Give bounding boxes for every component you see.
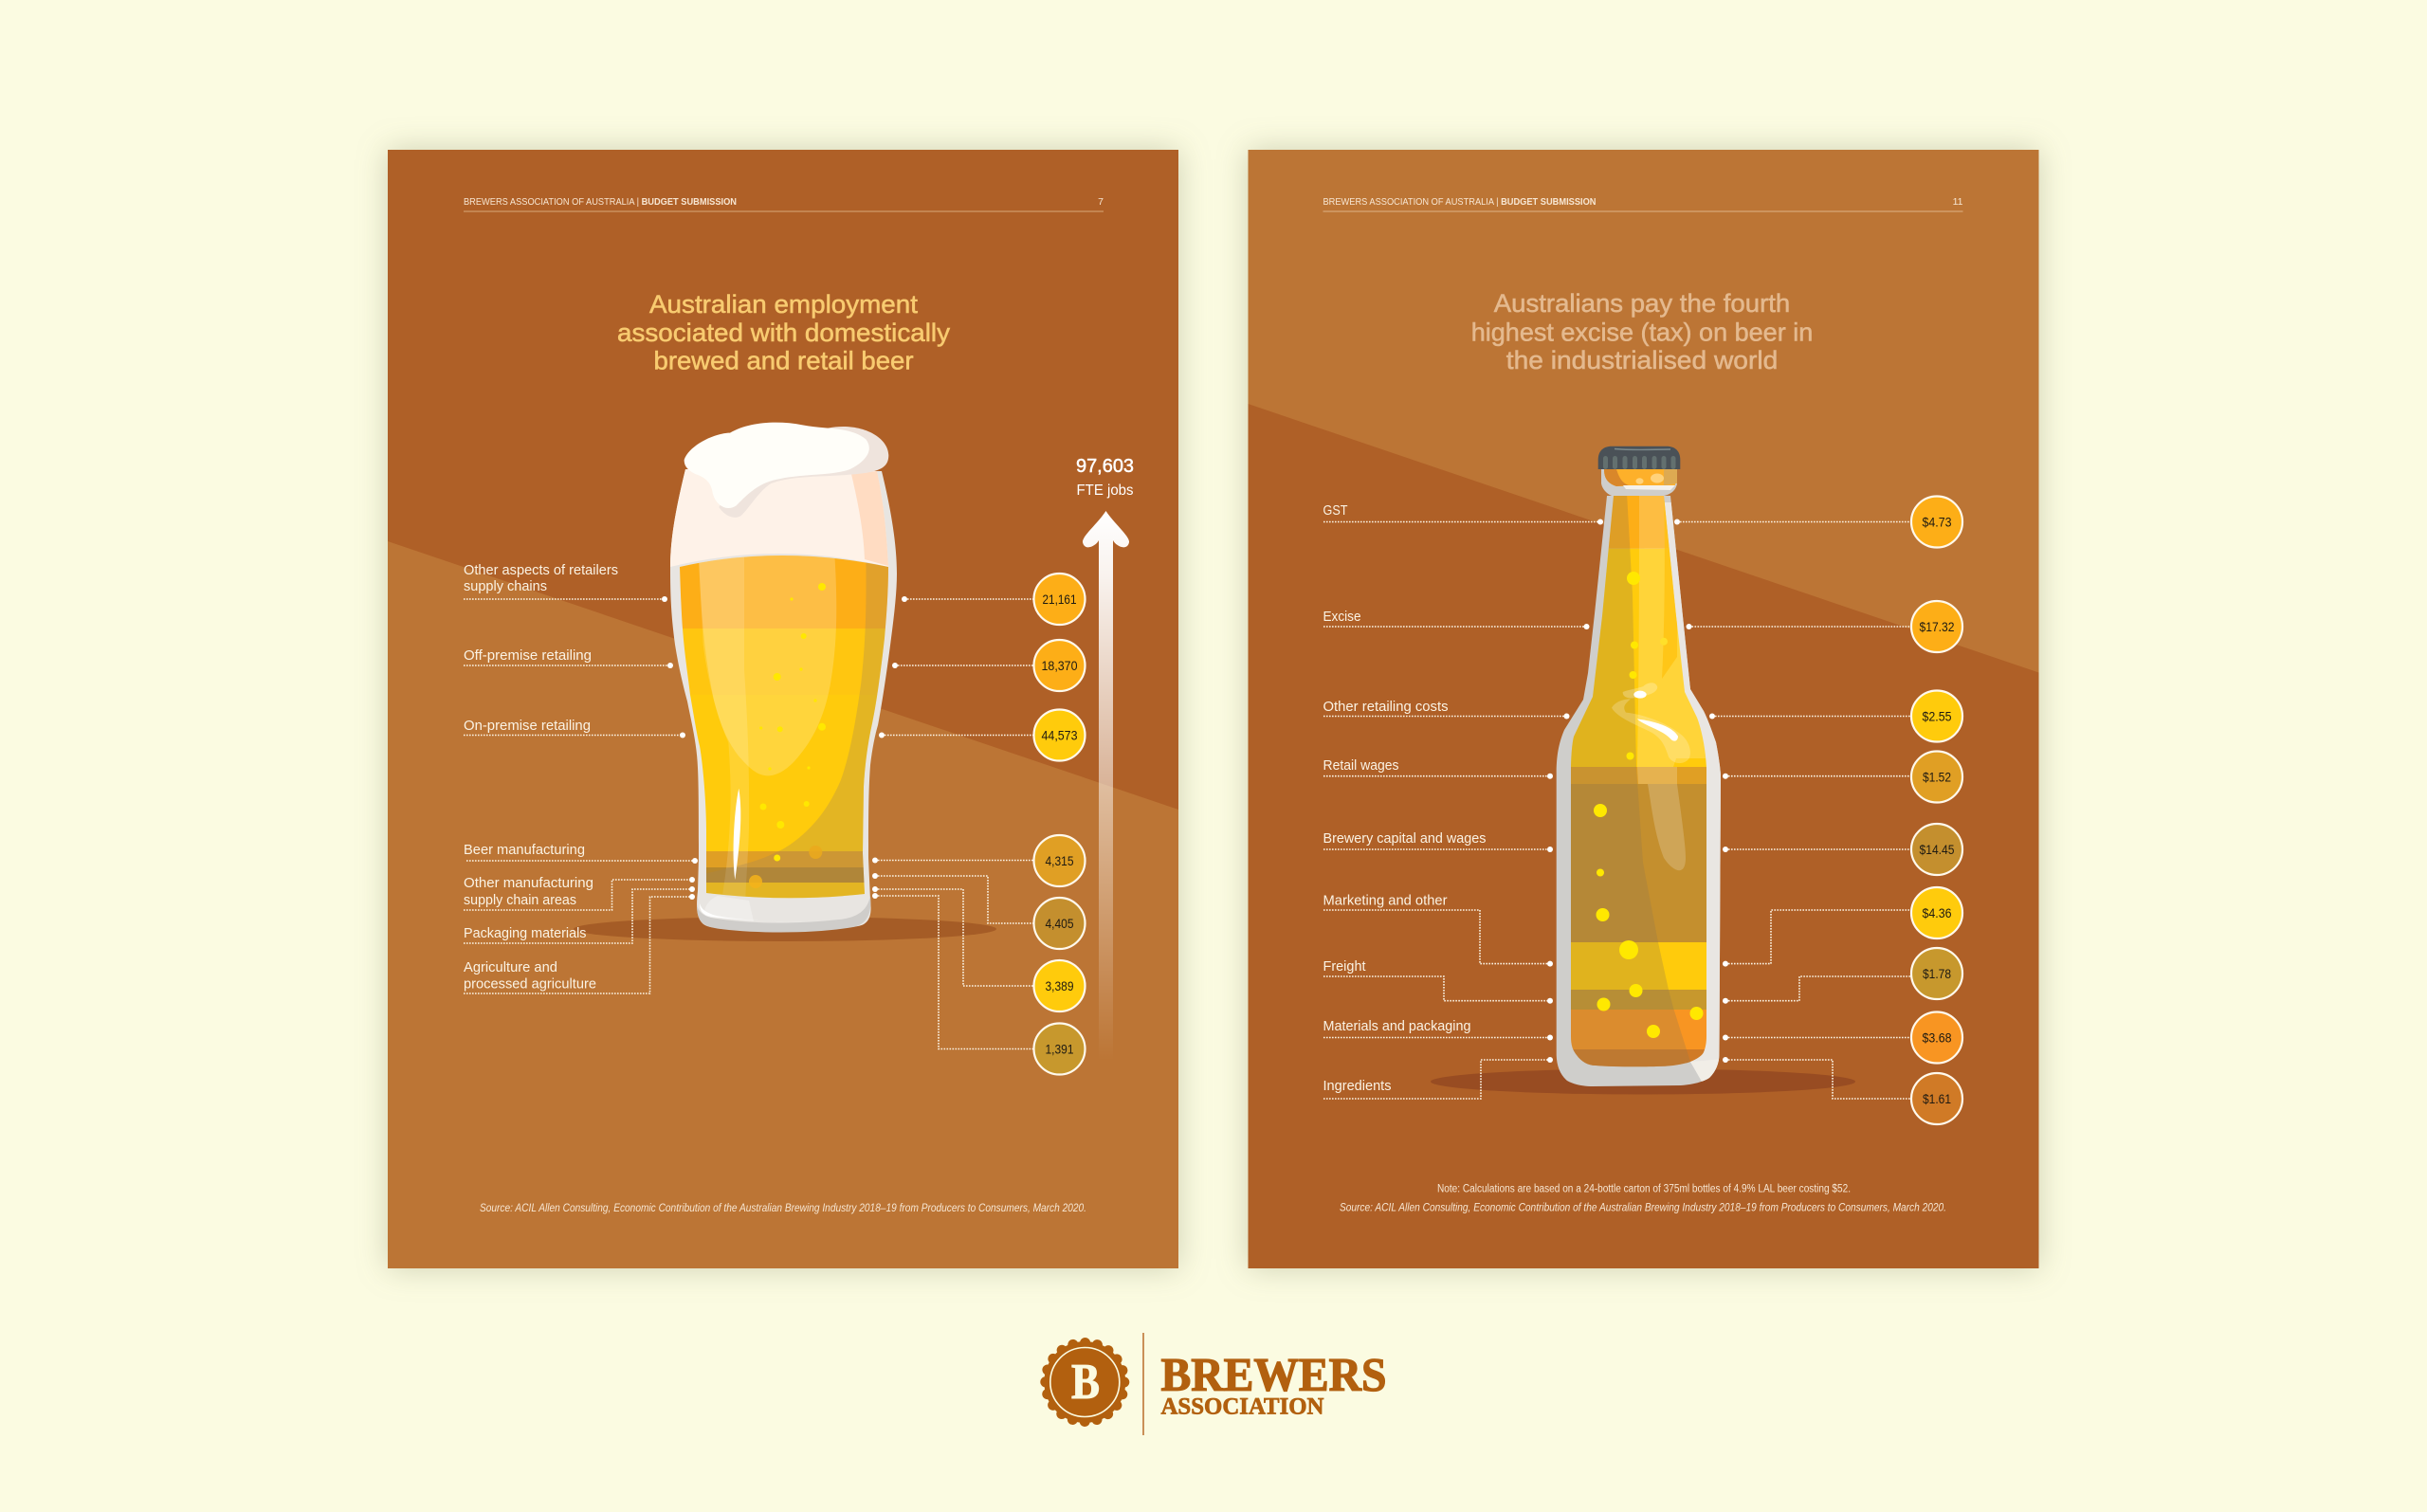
page header: 7 — [1098, 196, 1104, 208]
row: Excise: $17.32 — [1919, 620, 1955, 634]
lighter diagonal background area — [388, 541, 1178, 1268]
beer bubbles — [749, 583, 826, 888]
row: beer manufacturing: 4,315 — [1045, 854, 1073, 868]
bottle bubbles — [1594, 572, 1703, 1038]
row: marketing and other: $4.36 — [1923, 906, 1951, 920]
bottle glass — [1557, 496, 1721, 1086]
source note: Source: ACIL Allen Consulting, Economic Contribution of the Australian Brewing Industry 2018–19 from Producers to Consumers, March 2020. — [480, 1203, 1086, 1214]
row: materials and packaging: Materials and packaging — [1323, 1018, 1471, 1034]
total jobs figure — [1076, 456, 1134, 499]
foam — [684, 423, 888, 518]
bottle lip — [1601, 469, 1677, 496]
row: materials and packaging: $3.68 — [1923, 1031, 1951, 1045]
row: other retailing costs — [1323, 690, 1962, 741]
panel base with shadow — [388, 150, 1178, 1268]
lighter diagonal background area — [1248, 150, 2038, 673]
glass body — [670, 469, 897, 931]
glass shadow — [574, 917, 996, 941]
row: GST — [1323, 497, 1962, 548]
panel: excise on beer page — [1248, 150, 2038, 1268]
row: packaging materials — [464, 886, 1085, 1011]
empty upper glass — [670, 469, 888, 567]
row: packaging materials: Packaging materials — [464, 925, 586, 941]
page header: 11 — [1953, 196, 1963, 208]
row: other aspects of retailers supply chains: 21,161 — [1043, 592, 1077, 607]
row: brewery capital and wages — [1323, 824, 1962, 875]
row: brewery capital and wages: Brewery capital and wages — [1323, 830, 1487, 847]
row: freight: Freight — [1323, 958, 1366, 975]
row: retail wages: Retail wages — [1323, 757, 1399, 774]
source note: Source: ACIL Allen Consulting, Economic Contribution of the Australian Brewing Industry 2018–19 from Producers to Consumers, March 2020. — [1340, 1202, 1946, 1213]
row: on-premise retailing: On-premise retailing — [464, 718, 591, 734]
growth arrow — [1083, 511, 1129, 1061]
title: excise: highest excise (tax) on beer in — [1471, 318, 1813, 346]
row: other retailing costs: $2.55 — [1923, 709, 1951, 724]
row: retail wages: $1.52 — [1923, 770, 1951, 785]
row: agriculture and processed agriculture: 1,391 — [1045, 1043, 1073, 1056]
row: brewery capital and wages: $14.45 — [1919, 843, 1955, 857]
bottle glass corner — [1690, 1060, 1719, 1082]
glass reflections — [734, 789, 740, 880]
title: excise — [1471, 289, 1813, 374]
logo badge: B — [1071, 1355, 1100, 1410]
row: other manufacturing supply chain areas: 4,405 — [1045, 917, 1073, 931]
logo: Brewers Association — [1044, 1333, 1386, 1435]
row: other manufacturing supply chain areas: Other manufacturing — [464, 875, 593, 891]
row: agriculture and processed agriculture — [464, 893, 1085, 1075]
total jobs figure: 97,603 — [1076, 456, 1134, 477]
logo wordmark: ASSOCIATION — [1160, 1394, 1323, 1420]
bottle shadow — [1431, 1069, 1855, 1094]
logo badge — [1044, 1341, 1125, 1423]
page header: BREWERS ASSOCIATION OF AUSTRALIA | BUDGET SUBMISSION — [1323, 196, 1597, 208]
row: marketing and other: Marketing and other — [1323, 893, 1447, 908]
bottle cap — [1598, 446, 1680, 469]
row: GST: GST — [1323, 502, 1348, 519]
title: employment: Australian employment — [649, 290, 919, 319]
title: employment: associated with domestically — [617, 319, 951, 347]
title: employment: brewed and retail beer — [654, 347, 914, 375]
row: on-premise retailing: 44,573 — [1041, 728, 1077, 743]
glass base shading — [697, 896, 870, 933]
row: retail wages — [1323, 751, 1962, 802]
title: excise: the industrialised world — [1506, 346, 1778, 374]
row: materials and packaging — [1323, 1012, 1962, 1064]
row: off-premise retailing: Off-premise retailing — [464, 647, 592, 664]
page header — [464, 196, 1104, 211]
bottle beer layers — [1571, 496, 1706, 1067]
illustration: beer bottle — [1555, 446, 1735, 1090]
glass right tint — [851, 471, 888, 566]
panel base with shadow — [1248, 150, 2038, 1268]
panel: Australian employment page — [388, 150, 1178, 1268]
row: other manufacturing supply chain areas — [464, 873, 1085, 949]
row: beer manufacturing: Beer manufacturing — [464, 842, 585, 858]
row: on-premise retailing — [464, 709, 1085, 760]
total jobs figure: FTE jobs — [1077, 483, 1134, 499]
title: employment — [617, 290, 951, 375]
row: ingredients: Ingredients — [1323, 1078, 1392, 1094]
page header: BREWERS ASSOCIATION OF AUSTRALIA | BUDGET SUBMISSION — [464, 196, 737, 208]
row: other aspects of retailers supply chains — [464, 562, 1085, 625]
row: Excise: Excise — [1323, 609, 1361, 625]
row: other aspects of retailers supply chains: Other aspects of retailers — [464, 562, 618, 578]
row: other retailing costs: Other retailing costs — [1323, 699, 1449, 715]
row: GST: $4.73 — [1923, 516, 1951, 529]
title: excise: Australians pay the fourth — [1494, 289, 1790, 318]
bottle glass light side — [1665, 502, 1721, 1081]
calculation note: Note: Calculations are based on a 24-bottle carton of 375ml bottles of 4.9% LAL beer costing $52. — [1437, 1183, 1851, 1194]
row: ingredients: $1.61 — [1923, 1092, 1951, 1106]
row: off-premise retailing: 18,370 — [1041, 659, 1077, 673]
row: agriculture and processed agriculture: Agriculture and — [464, 959, 557, 975]
row: other aspects of retailers supply chains: supply chains — [464, 578, 547, 594]
row: agriculture and processed agriculture: processed agriculture — [464, 976, 596, 992]
row: Excise — [1323, 601, 1962, 652]
logo wordmark: BREWERS — [1160, 1348, 1386, 1401]
row: off-premise retailing — [464, 640, 1085, 691]
row: beer manufacturing — [464, 835, 1085, 886]
row: freight: $1.78 — [1923, 967, 1951, 981]
row: other manufacturing supply chain areas: supply chain areas — [464, 892, 576, 908]
bottle highlight — [1633, 691, 1678, 741]
logo divider — [1142, 1333, 1144, 1435]
row: marketing and other — [1323, 887, 1962, 967]
beer layers — [680, 556, 888, 899]
row: packaging materials: 3,389 — [1045, 979, 1073, 993]
illustration: beer glass — [670, 423, 897, 933]
row: ingredients — [1323, 1057, 1962, 1124]
page header — [1323, 196, 1963, 211]
row: freight — [1323, 948, 1962, 1004]
